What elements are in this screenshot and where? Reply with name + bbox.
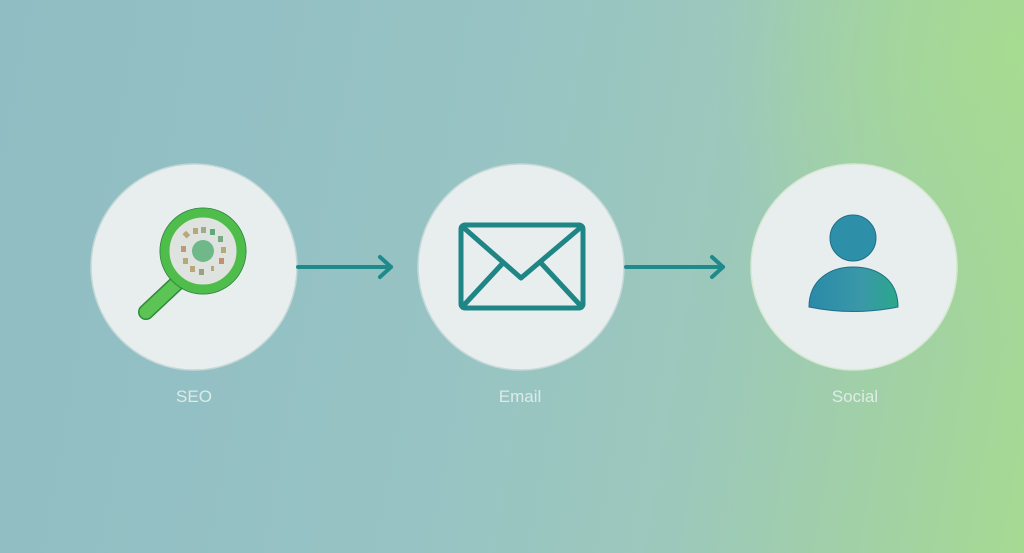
arrow: SEO to Email — [298, 257, 391, 277]
icon: envelope — [461, 225, 583, 308]
panel: SEO circle — [91, 164, 297, 370]
label: Email: Email — [499, 387, 541, 406]
icon: person — [809, 215, 898, 312]
icon: magnifier — [146, 208, 246, 312]
label: SEO: SEO — [176, 387, 212, 406]
panel: Email circle — [418, 164, 624, 370]
panel: Social circle — [751, 164, 957, 370]
label: Social: Social — [832, 387, 878, 406]
arrow: Email to Social — [626, 257, 723, 277]
